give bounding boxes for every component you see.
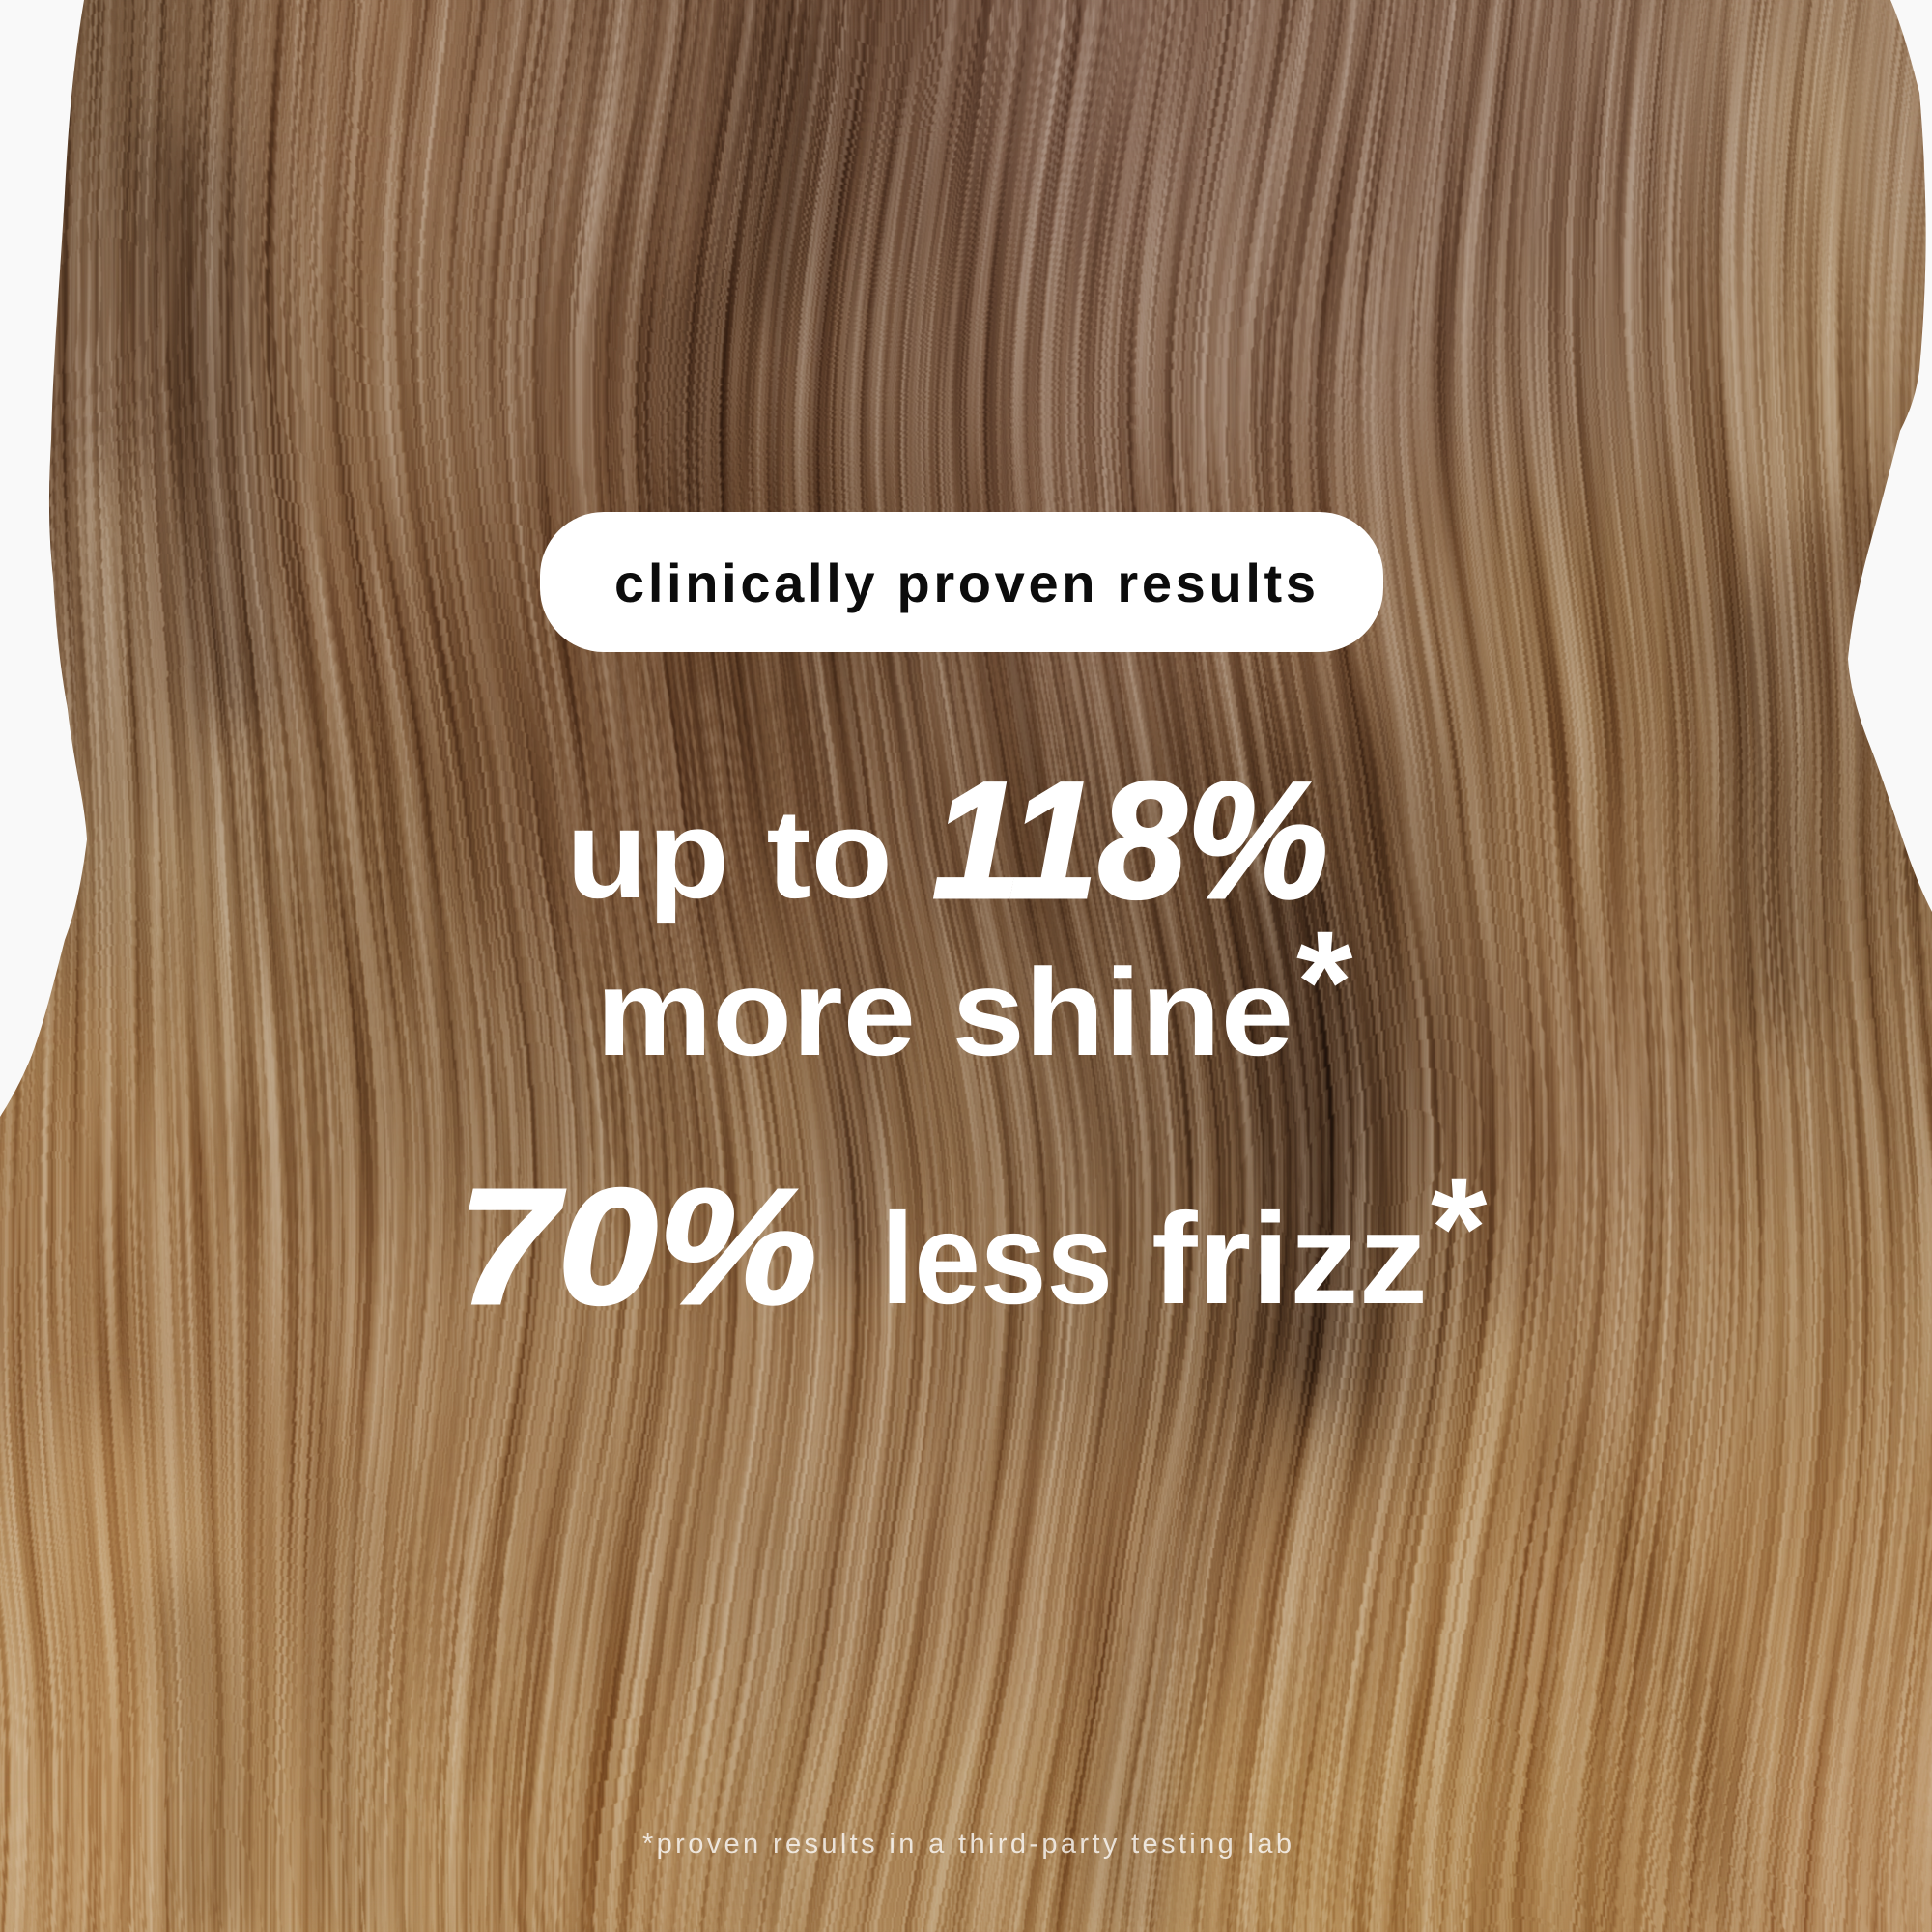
stat: 118% more shine: up to [566, 782, 893, 924]
stat: 70% less frizz: frizz [1151, 1187, 1428, 1331]
stat: 70% less frizz: less [881, 1187, 1113, 1331]
pill label: clinically proven results [614, 553, 1316, 613]
footnote: *proven results in a third-party testing lab [642, 1829, 1292, 1860]
stat: 70% less frizz [458, 1147, 1488, 1339]
stat: 70% less frizz: 70% [458, 1155, 817, 1339]
stat: 118% more shine [566, 748, 1353, 1082]
stat: 118% more shine: more shine [596, 944, 1293, 1082]
pill badge [540, 512, 1383, 652]
stat: 70% less frizz: * [1431, 1147, 1488, 1309]
stat: 118% more shine: 118% [932, 748, 1328, 933]
stat: 118% more shine: * [1296, 900, 1353, 1063]
